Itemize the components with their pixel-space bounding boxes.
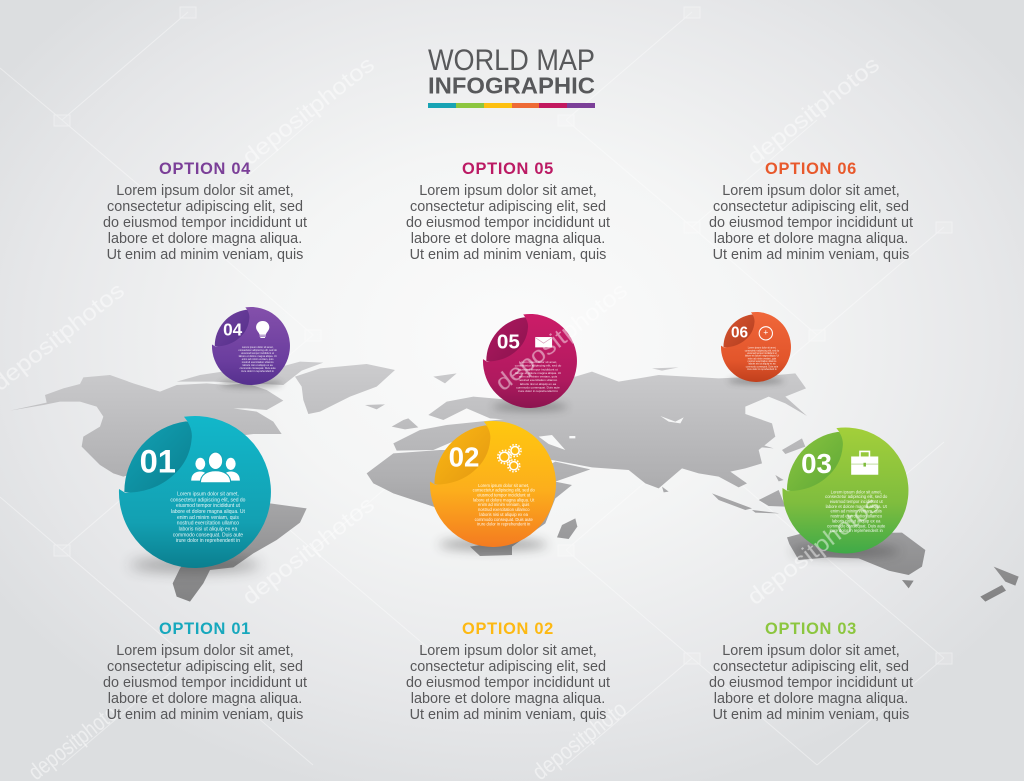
body text 05: Lorem ipsum dolor sit amet, [519,360,557,364]
text block: option 05: Ut enim ad minim veniam, quis [410,247,606,263]
body text 02 [473,483,535,527]
folded tab 01 [124,421,199,500]
body text 01: nostrud exercitation ullamco [177,521,239,527]
text block: option 02: do eiusmod tempor incididunt ut [406,675,610,691]
text block: option 03: OPTION 03 [765,620,857,638]
body 04 [212,307,290,385]
text block: option 03: consectetur adipiscing elit, sed [713,659,909,675]
text block: option 01 [103,620,307,723]
body 03 [782,427,908,553]
body text 02: enim ad minim veniam, quis [478,502,529,507]
circle 02 [430,421,556,550]
text block: option 02: consectetur adipiscing elit, sed [410,659,606,675]
body text 02: eiusmod tempor incididunt ut [477,493,531,498]
text block: option 06: consectetur adipiscing elit, sed [713,199,909,215]
folded tab 02 [434,425,496,490]
icon: briefcase [851,451,878,475]
body text 05: eiusmod tempor incididunt ut [518,367,558,371]
watermarks: depositphotos [237,51,379,170]
body text 05: labore et dolore magna aliqua. Ut [515,371,561,375]
shadow 05 [492,402,568,411]
body text 04: consectetur adipiscing elit, sed do [238,348,277,352]
body text 03 [825,489,888,533]
body text 05: irure dolor in reprehenderit in [518,389,558,393]
body text 06: nostrud exercitation ullamco [748,360,777,363]
body text 03: laboris nisi ut aliquip ex ea [832,518,881,523]
shadow 04 [220,380,282,387]
text block: option 04: OPTION 04 [159,160,251,178]
body text 04: commodo consequat. Duis aute [240,366,276,370]
body text 06: enim ad minim veniam, quis [748,358,777,360]
body text 05: commodo consequat. Duis aute [516,385,560,389]
text block: option 04: do eiusmod tempor incididunt ut [103,215,307,231]
text block: option 02: labore et dolore magna aliqua. [411,691,605,707]
body 05 [483,314,577,408]
body text 04: irure dolor in reprehenderit in [241,369,275,373]
body text 06: commodo consequat. Duis aute [746,365,779,368]
body text 01: Lorem ipsum dolor sit amet, [177,491,239,497]
body text 03: consectetur adipiscing elit, sed do [825,494,888,499]
text block: option 02: Ut enim ad minim veniam, quis [410,707,606,723]
world map [10,362,1019,602]
icon: people [191,452,240,483]
text block: option 06: OPTION 06 [765,160,857,178]
number 03: 03 [801,448,832,479]
folded tab 05 [486,317,532,366]
text block: option 01: Ut enim ad minim veniam, quis [107,707,303,723]
body text 05: nostrud exercitation ullamco [519,378,558,382]
number 01: 01 [140,442,176,479]
circle 05 [483,314,577,411]
body text 01 [170,491,246,544]
text block: option 03: labore et dolore magna aliqua. [714,691,908,707]
shadow 02 [439,539,547,550]
folded tab 03 [787,432,849,497]
text block: option 01: Lorem ipsum dolor sit amet, [116,643,294,659]
text block: option 02: Lorem ipsum dolor sit amet, [419,643,597,659]
watermarks: depositphotos [742,491,884,610]
map: Asia, Australia and Oceania [512,367,1019,602]
body text 05: laboris nisi ut aliquip ex ea [520,382,556,386]
text block: option 05: Lorem ipsum dolor sit amet, [419,183,597,199]
body text 06: irure dolor in reprehenderit in [747,368,777,371]
circle 04 [212,307,290,387]
body 06 [721,312,791,382]
watermarks: depositphotos [742,51,884,170]
number 05: 05 [497,330,520,353]
number 06: 06 [731,325,748,342]
text block: option 03 [709,620,913,723]
text block: option 06: Lorem ipsum dolor sit amet, [722,183,900,199]
body text 01: labore et dolore magna aliqua. Ut [171,509,245,515]
text block: option 02: OPTION 02 [462,620,554,638]
body text 04: laboris nisi ut aliquip ex ea [243,363,273,367]
icon: envelope [535,337,552,347]
text block: option 05: labore et dolore magna aliqua. [411,231,605,247]
body text 01: commodo consequat. Duis aute [173,532,243,538]
body text 05: enim ad minim veniam, quis [519,375,558,379]
body text 01: laboris nisi ut aliquip ex ea [179,527,237,533]
body text 01: consectetur adipiscing elit, sed do [170,497,246,503]
icon: compass [759,327,772,340]
body text 04: enim ad minim veniam, quis [242,357,274,361]
body text 03: nostrud exercitation ullamco [830,514,883,519]
text block: option 05: do eiusmod tempor incididunt ut [406,215,610,231]
body text 03: enim ad minim veniam, quis [831,509,882,514]
body text 03: commodo consequat. Duis aute [827,523,886,528]
title line 2: INFOGRAPHIC [428,72,595,98]
body text 01: enim ad minim veniam, quis [177,515,239,521]
body text 01: eiusmod tempor incididunt ut [176,503,240,509]
body text 05 [515,360,561,393]
text block: option 04: Lorem ipsum dolor sit amet, [116,183,294,199]
text block: option 06 [709,160,913,263]
body text 06: labore et dolore magna aliqua. Ut [745,355,779,358]
number 04: 04 [223,319,243,339]
text block: option 05 [406,160,610,263]
body text 03: eiusmod tempor incididunt ut [830,499,884,504]
circle 06 [721,312,791,384]
text block: option 06: labore et dolore magna aliqua. [714,231,908,247]
text block: option 03: Lorem ipsum dolor sit amet, [722,643,900,659]
text block: option 01: labore et dolore magna aliqua. [108,691,302,707]
folded tab 04 [215,310,253,350]
text block: option 02 [406,620,610,723]
folded tab 06 [723,314,758,350]
body text 04 [238,345,277,373]
body text 06 [745,347,780,371]
body text 01: irure dolor in reprehenderit in [176,538,240,544]
body text 06: consectetur adipiscing elit, sed do [745,349,780,352]
shadow 06 [728,378,784,384]
map: Americas and Atlantic [10,362,512,602]
body text 02: labore et dolore magna aliqua. Ut [473,497,535,502]
text block: option 01: do eiusmod tempor incididunt ut [103,675,307,691]
icon: light bulb [256,321,269,338]
body text 06: laboris nisi ut aliquip ex ea [748,363,776,366]
title [428,44,595,98]
title colour bar [428,103,595,108]
circle 03 [782,427,908,557]
body 02 [430,421,556,547]
body text 02: irure dolor in reprehenderit in [477,522,531,527]
text block: option 04: Ut enim ad minim veniam, quis [107,247,303,263]
text block: option 06: Ut enim ad minim veniam, quis [713,247,909,263]
text block: option 01: OPTION 01 [159,620,251,638]
text block: option 06: do eiusmod tempor incididunt ut [709,215,913,231]
body text 04: nostrud exercitation ullamco [242,360,274,364]
body text 06: eiusmod tempor incididunt ut [747,352,777,355]
number 02: 02 [449,441,479,472]
body text 02: Lorem ipsum dolor sit amet, [478,483,529,488]
text block: option 04 [103,160,307,263]
body text 04: Lorem ipsum dolor sit amet, [242,345,274,349]
body text 06: Lorem ipsum dolor sit amet, [748,347,776,350]
body text 02: commodo consequat. Duis aute [475,517,534,522]
body text 04: eiusmod tempor incididunt ut [241,351,274,355]
watermarks: depositphotos [237,491,379,610]
body text 05: consectetur adipiscing elit, sed do [515,364,561,368]
title line 1: WORLD MAP [428,44,595,77]
text block: option 04: consectetur adipiscing elit, sed [107,199,303,215]
text block: option 03: Ut enim ad minim veniam, quis [713,707,909,723]
body text 02: consectetur adipiscing elit, sed do [473,488,535,493]
body text 04: labore et dolore magna aliqua. Ut [239,354,277,358]
icon: gears [498,445,521,472]
watermarks: depositphotos [490,277,632,396]
body text 02: laboris nisi ut aliquip ex ea [479,512,529,517]
circle 01 [119,416,271,572]
body text 03: irure dolor in reprehenderit in [830,528,883,533]
shadow 03 [791,545,900,557]
text block: option 03: do eiusmod tempor incididunt ut [709,675,913,691]
body text 03: labore et dolore magna aliqua. Ut [826,504,888,509]
text block: option 04: labore et dolore magna aliqua. [108,231,302,247]
body text 03: Lorem ipsum dolor sit amet, [831,489,882,494]
text block: option 05: OPTION 05 [462,160,554,178]
shadow 01 [130,558,260,572]
text block: option 05: consectetur adipiscing elit, sed [410,199,606,215]
body text 02: nostrud exercitation ullamco [478,507,530,512]
text block: option 01: consectetur adipiscing elit, sed [107,659,303,675]
body 01 [119,416,271,568]
